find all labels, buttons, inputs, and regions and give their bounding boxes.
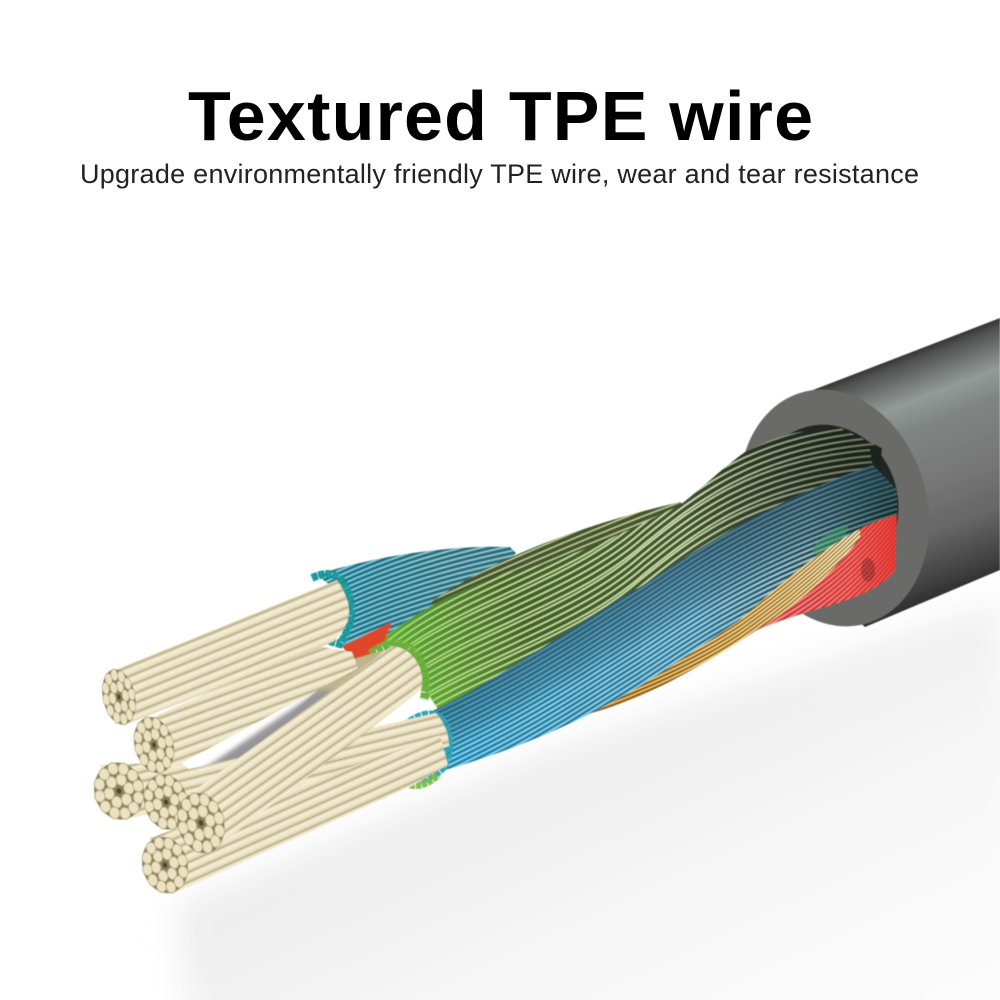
cable illustration [87, 318, 1000, 899]
jacket inner hole [738, 408, 916, 598]
yellow wire bundle [590, 528, 861, 714]
tan conductor D [137, 713, 449, 835]
green wire bundle [380, 428, 882, 709]
tan conductor G [135, 735, 448, 899]
blue wire bundle [432, 464, 898, 770]
inner tan strand bundle [881, 452, 882, 454]
jacket cut face [713, 368, 955, 648]
cross-section [87, 756, 151, 826]
cross-section [135, 831, 195, 899]
cross-section [137, 769, 195, 835]
teal insulation ring [312, 574, 351, 644]
tan conductor: rear lone strand [87, 756, 215, 826]
cable drop shadow [175, 600, 1000, 1000]
green insulation ring [371, 644, 426, 700]
tan conductor A [97, 580, 349, 728]
red conductor fragment behind the ends [342, 622, 392, 668]
rear green wire bundle [430, 501, 682, 605]
cross-section [128, 712, 180, 778]
gap shadow between conductors [190, 690, 345, 778]
title: Textured TPE wire [188, 77, 813, 155]
tan backing between conductors [290, 650, 385, 725]
blue insulation ring [404, 714, 449, 782]
tan conductor E [170, 646, 422, 859]
teal rear wire bundle [316, 546, 516, 646]
tan conductor B [128, 645, 358, 778]
subtitle: Upgrade environmentally friendly TPE wire, wear and tear resistance [80, 159, 919, 189]
cross-section [97, 666, 141, 728]
outer jacket of the cable [745, 318, 1000, 628]
cross-section [170, 787, 232, 859]
green insulation beads [410, 775, 438, 786]
red wire bundle [757, 514, 898, 630]
